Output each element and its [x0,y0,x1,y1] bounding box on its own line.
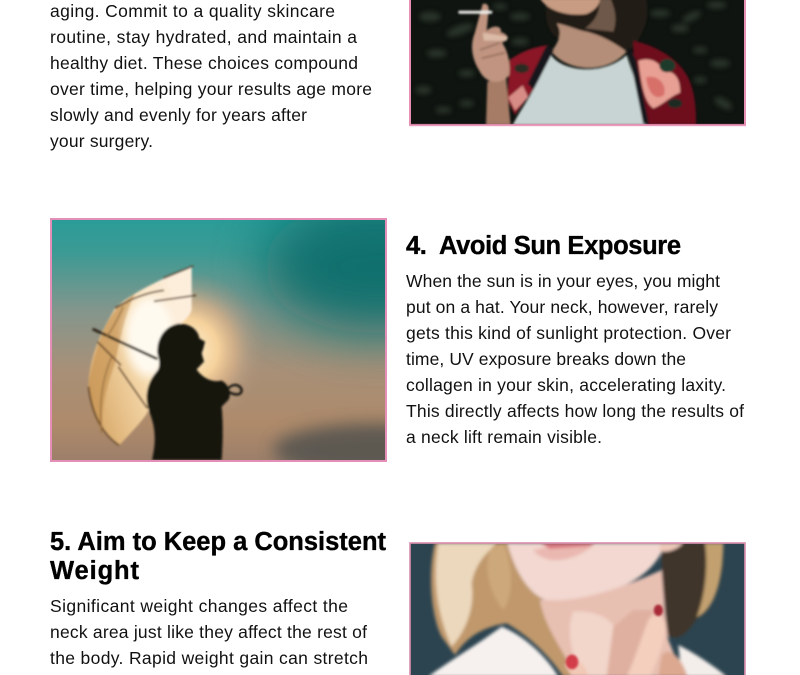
ear [660,543,683,552]
body text: tip 5: Significant weight changes affect the [50,596,348,616]
body text: end of tip 3: aging. Commit to a quality skincare [50,1,335,21]
body text: end of tip 3: routine, stay hydrated, and maintain a [50,27,357,47]
body text: tip 5 [50,596,368,668]
arm and hand [486,77,511,125]
hair [546,0,648,50]
jacket right [633,41,696,125]
jacket left [507,45,548,115]
photo: silhouette with umbrella at sunset [50,218,387,462]
lips [533,543,595,560]
body text: tip 4: time, UV exposure breaks down the [406,349,686,369]
body text: tip 5: the body. Rapid weight gain can stretch [50,648,368,668]
dark hair right [660,544,708,639]
heading: tip 5 [50,528,386,585]
photo: woman holding a cigarette [410,0,745,125]
umbrella handle [226,382,244,398]
body text: end of tip 3: over time, helping your results age more [50,79,372,99]
body text: end of tip 3: your surgery. [50,131,153,151]
fingers [627,615,665,675]
white shirt [513,53,646,125]
photo frame [410,0,745,125]
body text: tip 4: This directly affects how long the results of [406,401,744,421]
blonde hair left [431,543,577,675]
body text: tip 5: neck area just like they affect the rest of [50,622,367,642]
body text: tip 4: a neck lift remain visible. [406,427,602,447]
sun glow [180,276,255,391]
photo frame [410,543,745,675]
neck [540,570,683,675]
heading: tip 5: Weight [50,557,140,585]
heading: tip 4: 4. Avoid Sun Exposure [406,232,681,260]
neck [552,23,627,68]
body text: tip 4: gets this kind of sunlight protection. Over [406,323,731,343]
body text: end of tip 3: slowly and evenly for years after [50,105,307,125]
white collar [428,627,558,675]
photo: woman touching her neck [410,543,745,675]
umbrella canopy [89,267,192,445]
body text: end of tip 3: healthy diet. These choices compound [50,53,358,73]
red nails [654,605,663,616]
silhouette [147,324,230,460]
photo frame [51,219,386,461]
face [507,543,665,602]
body text: tip 4: When the sun is in your eyes, you might [406,271,720,291]
dusky lower right [266,414,385,460]
body text: end of tip 3 [50,1,372,151]
body text: tip 4: put on a hat. Your neck, however, rarely [406,297,718,317]
rose [638,59,680,108]
darker teal upper right [236,220,385,372]
heading: tip 5: 5. Aim to Keep a Consistent [50,528,386,556]
body text: tip 4 [406,271,744,447]
body text: tip 4: collagen in your skin, accelerating laxity. [406,375,726,395]
